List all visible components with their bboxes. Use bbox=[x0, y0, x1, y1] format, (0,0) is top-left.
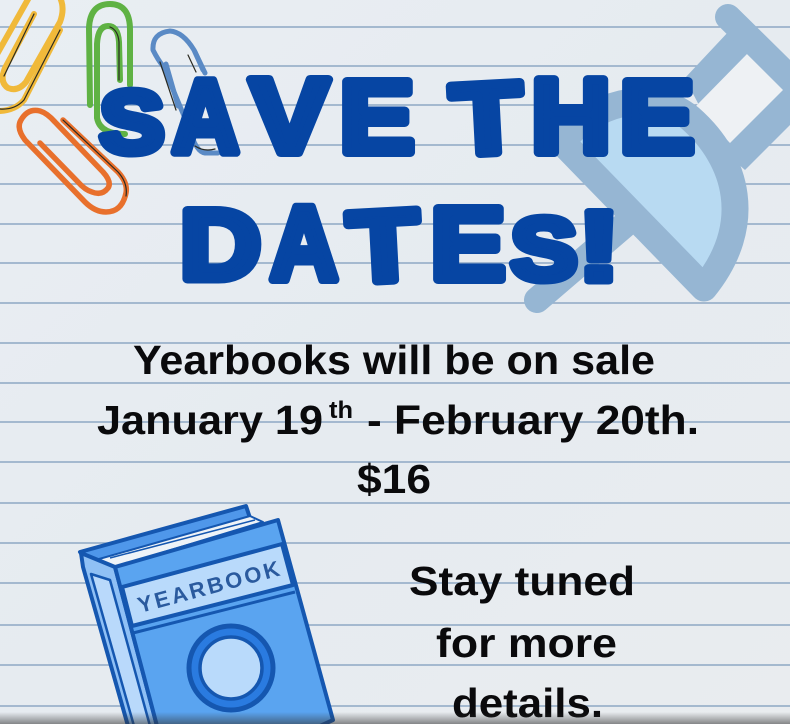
stay tuned text: Stay tuned bbox=[409, 558, 635, 604]
title: A bbox=[270, 186, 338, 302]
back cover bbox=[80, 506, 250, 566]
pages bbox=[92, 516, 263, 567]
icon: blue paperclip bbox=[153, 31, 218, 153]
title: E bbox=[620, 60, 694, 174]
sale announcement text: $16 bbox=[357, 456, 431, 502]
stay tuned text: for more bbox=[436, 620, 617, 666]
bottom shadow bbox=[0, 712, 790, 724]
icon: green paperclip bbox=[89, 4, 130, 134]
sale announcement text bbox=[97, 337, 699, 502]
sale announcement text: Yearbooks will be on sale bbox=[133, 337, 655, 383]
label band bbox=[122, 544, 293, 626]
title: ! bbox=[576, 191, 622, 303]
title: E bbox=[340, 60, 414, 174]
title: V bbox=[250, 58, 329, 176]
icon: yearbook bbox=[80, 506, 333, 724]
title bbox=[100, 58, 694, 304]
sale announcement text: th bbox=[329, 397, 353, 424]
icon: orange paperclip bbox=[19, 110, 126, 212]
stripe bbox=[133, 592, 295, 633]
pin body fill bbox=[562, 104, 730, 286]
sale announcement text: January 19 bbox=[97, 397, 323, 443]
cover emblem bbox=[189, 626, 273, 710]
icon: push pin bbox=[537, 17, 790, 300]
pin head outline bbox=[685, 30, 790, 170]
pin dome bbox=[562, 101, 735, 288]
pin top bar bbox=[728, 17, 790, 88]
title: S bbox=[100, 74, 164, 171]
stay tuned text bbox=[409, 558, 635, 724]
title: T bbox=[345, 189, 422, 304]
title: H bbox=[531, 58, 611, 176]
spine bbox=[81, 553, 157, 724]
title: T bbox=[449, 61, 525, 177]
icon: yellow paperclip bbox=[0, 0, 63, 111]
title: D bbox=[180, 189, 261, 300]
sale announcement text: - February 20th. bbox=[367, 397, 699, 443]
front cover bbox=[115, 520, 333, 724]
title: E bbox=[430, 186, 506, 302]
title: S bbox=[511, 201, 577, 298]
title: A bbox=[172, 60, 239, 176]
yearbook label text: YEARBOOK bbox=[135, 556, 282, 618]
pin window bbox=[695, 54, 783, 143]
pin needle bbox=[537, 222, 628, 300]
